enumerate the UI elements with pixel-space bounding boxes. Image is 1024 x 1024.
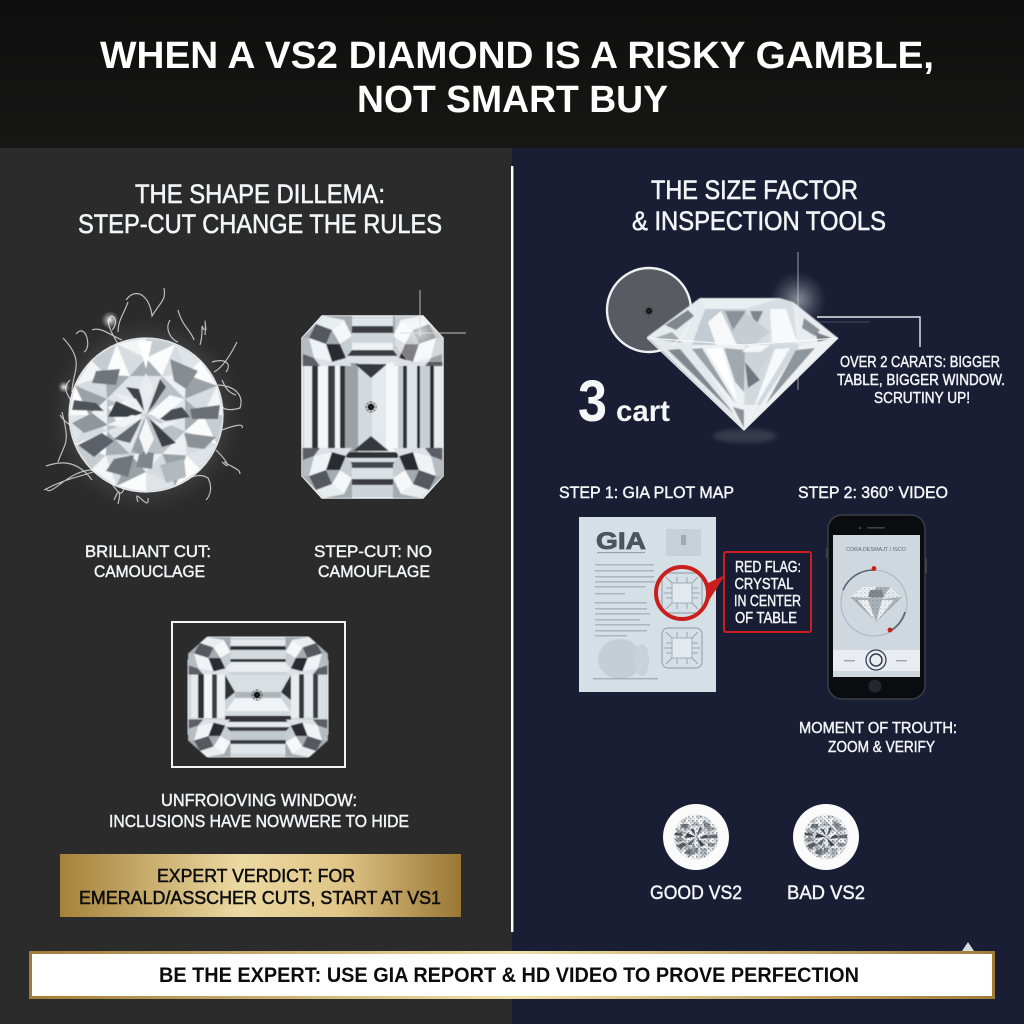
- heading: shape dilemma: [78, 179, 442, 239]
- footer banner: [29, 951, 995, 999]
- label: brilliant cut: CAMOUCLAGE: [94, 563, 205, 581]
- heading: size factor: THE SIZE FACTOR: [651, 175, 858, 205]
- callout: expert verdict: [60, 854, 461, 917]
- label: brilliant cut: [85, 543, 211, 581]
- callout: over 2 carats: [817, 317, 1005, 407]
- label: step-cut: STEP-CUT: NO: [314, 543, 432, 561]
- label: step 1: STEP 1: GIA PLOT MAP: [559, 484, 734, 502]
- callout: red flag: CRYSTAL: [734, 576, 794, 593]
- heading: size factor: [632, 175, 886, 236]
- callout: red flag: RED FLAG:: [735, 559, 801, 576]
- icon: smartphone 360 video: [826, 515, 927, 699]
- title: WHEN A VS2 DIAMOND IS A RISKY GAMBLE,: [100, 35, 934, 77]
- heading: size factor: & INSPECTION TOOLS: [632, 206, 886, 236]
- label: moment of truth: ZOOM & VERIFY: [828, 739, 935, 756]
- title: [100, 35, 934, 121]
- label: step-cut: [314, 543, 432, 581]
- icon: framed diamond window: [172, 622, 345, 767]
- callout: expert verdict: EMERALD/ASSCHER CUTS, START AT VS1: [79, 887, 441, 908]
- icon: magnifier loupe with inclusion: [607, 268, 691, 352]
- label: step-cut: CAMOUFLAGE: [318, 563, 430, 581]
- icon: brilliant round diamond: [44, 288, 242, 509]
- center divider: [511, 166, 513, 932]
- callout: over 2 carats: SCRUTINY UP!: [874, 390, 970, 407]
- label: unforgiving window: INCLUSIONS HAVE NOWWERE TO HIDE: [109, 811, 409, 831]
- header banner: [0, 0, 1024, 148]
- label: 3 cart: 3: [578, 369, 607, 434]
- callout: expert verdict: EXPERT VERDICT: FOR: [157, 865, 355, 886]
- label: unforgiving window: [109, 790, 409, 831]
- icon: GIA report: [579, 517, 725, 692]
- label: bad vs2: BAD VS2: [787, 883, 865, 904]
- title: NOT SMART BUY: [357, 79, 668, 121]
- callout: red flag: OF TABLE: [735, 610, 797, 627]
- label: step 2: STEP 2: 360° VIDEO: [798, 484, 948, 502]
- decorative sparkle behind banner: [962, 942, 974, 951]
- label: brilliant cut: BRILLIANT CUT:: [85, 543, 211, 561]
- label: unforgiving window: UNFROIOVING WINDOW:: [161, 790, 357, 810]
- icon: bad vs2 diamond: [793, 804, 859, 870]
- label: 3 cart: cart: [616, 395, 670, 428]
- panel: size factor: [559, 175, 1005, 904]
- callout: red flag: [724, 552, 811, 632]
- callout: red flag: IN CENTER: [734, 593, 801, 610]
- heading: shape dilemma: STEP-CUT CHANGE THE RULES: [78, 209, 442, 239]
- callout: over 2 carats: TABLE, BIGGER WINDOW.: [837, 372, 1005, 389]
- icon: emerald cut diamond with inclusion: [302, 290, 466, 498]
- label: good vs2: GOOD VS2: [650, 883, 742, 904]
- icon: smartphone 360 video: CORA DESMAJT / ISCO: [846, 547, 906, 553]
- icon: large side-view diamond: [647, 252, 870, 443]
- label: moment of truth: MOMENT OF TROUTH:: [799, 720, 957, 737]
- panel: shape dilemma: [44, 179, 466, 917]
- label: 3 cart: [578, 369, 670, 434]
- label: moment of truth: [799, 720, 957, 756]
- icon: good vs2 diamond: [663, 804, 729, 870]
- icon: GIA report: GIA: [596, 528, 646, 555]
- heading: shape dilemma: THE SHAPE DILLEMA:: [135, 179, 385, 209]
- footer banner: BE THE EXPERT: USE GIA REPORT & HD VIDEO TO PROVE PERFECTION: [159, 963, 859, 987]
